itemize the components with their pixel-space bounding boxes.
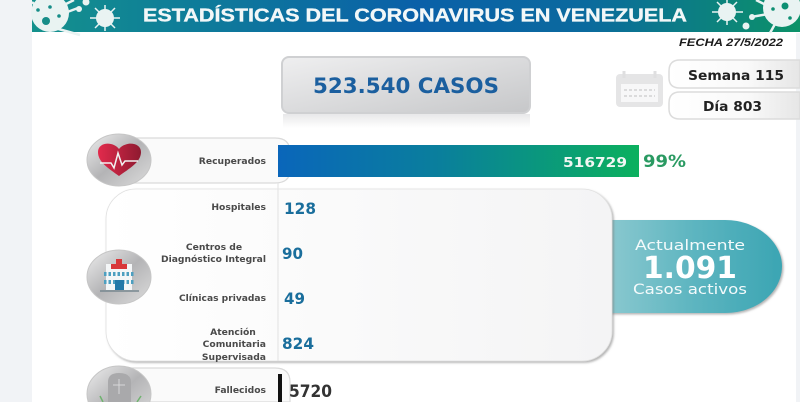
week pill xyxy=(669,60,800,88)
row: hospitales xyxy=(211,199,316,218)
row: hospitales: 128 xyxy=(284,199,316,218)
active cases tab: Actualmente xyxy=(635,238,745,254)
row: centros de diagnostico: Diagnóstico Integral xyxy=(161,254,266,265)
header banner xyxy=(32,0,800,32)
panel: recuperados xyxy=(87,134,686,186)
row: clinicas privadas xyxy=(179,289,305,308)
row: hospitales: Hospitales xyxy=(211,202,267,213)
recovered bar xyxy=(278,145,639,177)
icon: virus left small xyxy=(90,5,120,31)
row: atencion comunitaria: Comunitaria xyxy=(203,339,266,350)
row: clinicas privadas: 49 xyxy=(284,289,305,308)
row: atencion comunitaria: 824 xyxy=(282,334,314,353)
row: atencion comunitaria: Atención xyxy=(210,327,256,338)
active cases tab: Casos activos xyxy=(633,282,747,298)
icon: heart xyxy=(87,134,151,186)
total cases value: 523.540 CASOS xyxy=(313,74,499,98)
row: centros de diagnostico: Centros de xyxy=(186,242,242,253)
panel: fallecidos xyxy=(87,366,332,402)
icon: hospital xyxy=(87,250,151,304)
row: centros de diagnostico: 90 xyxy=(282,244,303,263)
week pill: Semana 115 xyxy=(688,69,784,84)
deaths value: 5720 xyxy=(289,382,332,402)
panel: care centres xyxy=(87,183,612,363)
day pill: Día 803 xyxy=(703,100,762,115)
icon: virus right large xyxy=(749,0,800,33)
total cases box xyxy=(282,57,530,128)
icon: virus left large xyxy=(31,0,90,35)
deaths bar xyxy=(278,374,282,402)
row: clinicas privadas: Clínicas privadas xyxy=(179,293,267,304)
recovered bar: 516729 xyxy=(563,156,627,171)
recovered percent: 99% xyxy=(643,152,686,172)
day pill xyxy=(669,92,800,119)
panel: fallecidos: Fallecidos xyxy=(215,385,267,396)
row: centros de diagnostico xyxy=(161,242,303,265)
panel: recuperados: Recuperados xyxy=(199,156,267,167)
active cases tab: 1.091 xyxy=(643,251,737,286)
row: atencion comunitaria: Supervisada xyxy=(202,352,266,363)
icon: virus right small xyxy=(712,0,750,30)
icon: tombstone xyxy=(87,366,151,402)
icon: calendar xyxy=(616,71,663,107)
title: ESTADÍSTICAS DEL CORONAVIRUS EN VENEZUELA xyxy=(143,4,687,26)
row: atencion comunitaria xyxy=(202,327,314,363)
active cases tab xyxy=(605,220,782,313)
date: FECHA 27/5/2022 xyxy=(679,37,783,49)
